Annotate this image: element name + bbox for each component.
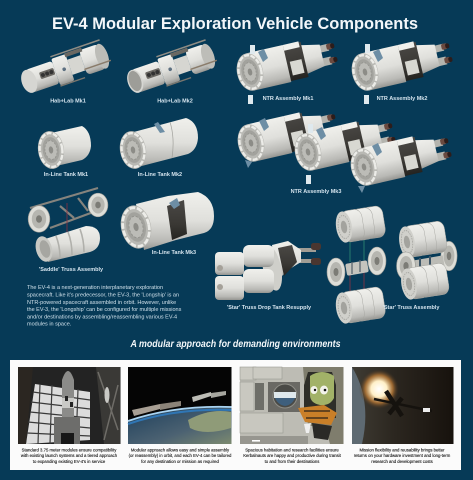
component: NTR Assembly Mk1: NTR Assembly Mk1 bbox=[263, 96, 313, 102]
description text: the EV-3, the 'Longship' can be configured for multiple missions bbox=[27, 307, 182, 313]
component: In-Line Tank Mk3 bbox=[117, 192, 214, 256]
component: In-Line Tank Mk1 bbox=[35, 126, 91, 178]
caption: standard modules bbox=[21, 448, 118, 464]
caption: habitation: to and from their destinations bbox=[265, 459, 319, 464]
description text: and/or destinations by assembling/reassembling various EV-4 bbox=[27, 314, 177, 320]
component: In-Line Tank Mk3: In-Line Tank Mk3 bbox=[152, 250, 196, 256]
panel: photo strip bbox=[10, 360, 461, 470]
caption: flexibility: Mission flexibility and reusability brings better bbox=[359, 448, 445, 452]
caption: standard modules: Standard 3.75 meter modules ensure compatibility bbox=[22, 448, 117, 452]
caption: flexibility: research and development costs bbox=[371, 459, 433, 464]
component: NTR Assembly Mk2: NTR Assembly Mk2 bbox=[377, 96, 427, 102]
description text: The EV-4 is a next-generation interplanetary exploration bbox=[27, 285, 163, 291]
photo: rocket in assembly building bbox=[18, 367, 120, 444]
photo: spacecraft with sun behind bbox=[352, 367, 454, 444]
description text bbox=[27, 285, 182, 328]
caption: modular approach: for any destination or mission as required bbox=[141, 459, 219, 464]
component: Hab+Lab Mk1 bbox=[17, 38, 114, 104]
caption: habitation: Spacious habitation and research facilities ensure bbox=[245, 448, 339, 452]
title: EV-4 Modular Exploration Vehicle Components bbox=[52, 14, 418, 33]
component: NTR Assembly Mk1 bbox=[233, 34, 340, 104]
description text: NTR-powered spacecraft assembled in orbit. However, unlike bbox=[27, 300, 176, 306]
component: In-Line Tank Mk2 bbox=[117, 118, 198, 178]
component: Star truss assembly: 'Star' Truss Assembly bbox=[383, 305, 440, 311]
component: Star truss drop tank resupply: 'Star' Truss Drop Tank Resupply bbox=[227, 305, 312, 311]
photo: modules in orbit above planet bbox=[128, 367, 232, 444]
caption: habitation bbox=[243, 448, 342, 464]
subtitle: A modular approach for demanding environments bbox=[130, 339, 341, 350]
component: NTR Assembly Mk3 bbox=[234, 105, 454, 195]
caption: modular approach bbox=[129, 448, 232, 464]
caption: standard modules: to expanding existing EV-4's in service bbox=[33, 459, 106, 464]
component: In-Line Tank Mk2: In-Line Tank Mk2 bbox=[138, 172, 182, 178]
caption: standard modules: with existing launch systems and a tiered approach bbox=[21, 453, 118, 458]
component: NTR Assembly Mk2 bbox=[348, 34, 455, 104]
component: Star truss exploded view bbox=[327, 205, 386, 325]
component: In-Line Tank Mk1: In-Line Tank Mk1 bbox=[44, 172, 88, 178]
caption: modular approach: Modular approach allows easy and simple assembly bbox=[131, 448, 230, 452]
component: Hab+Lab Mk2 bbox=[123, 38, 220, 104]
caption: modular approach: (or reassembly) in orbit, and each EV-4 can be tailored bbox=[129, 453, 232, 458]
component: Hab+Lab Mk2: Hab+Lab Mk2 bbox=[157, 98, 193, 104]
description text: spacecraft. Like it's predecessor, the EV-3, the 'Longship' is an bbox=[27, 292, 179, 298]
description text: modules in space. bbox=[27, 322, 72, 328]
caption: habitation: Kerbalnauts are happy and productive during transit bbox=[243, 453, 342, 458]
component: Star truss assembly bbox=[383, 220, 457, 311]
component: Saddle truss assembly bbox=[28, 188, 108, 273]
caption: flexibility: returns on your hardware investment and long-term bbox=[354, 453, 451, 458]
caption: flexibility bbox=[354, 448, 451, 464]
component: Hab+Lab Mk1: Hab+Lab Mk1 bbox=[50, 98, 86, 104]
component: Saddle truss assembly: 'Saddle' Truss Assembly bbox=[39, 267, 104, 273]
photo: kerbal in habitat bbox=[240, 367, 344, 444]
component: NTR Assembly Mk3: NTR Assembly Mk3 bbox=[291, 189, 341, 195]
component: Star truss drop tank resupply bbox=[215, 241, 321, 311]
